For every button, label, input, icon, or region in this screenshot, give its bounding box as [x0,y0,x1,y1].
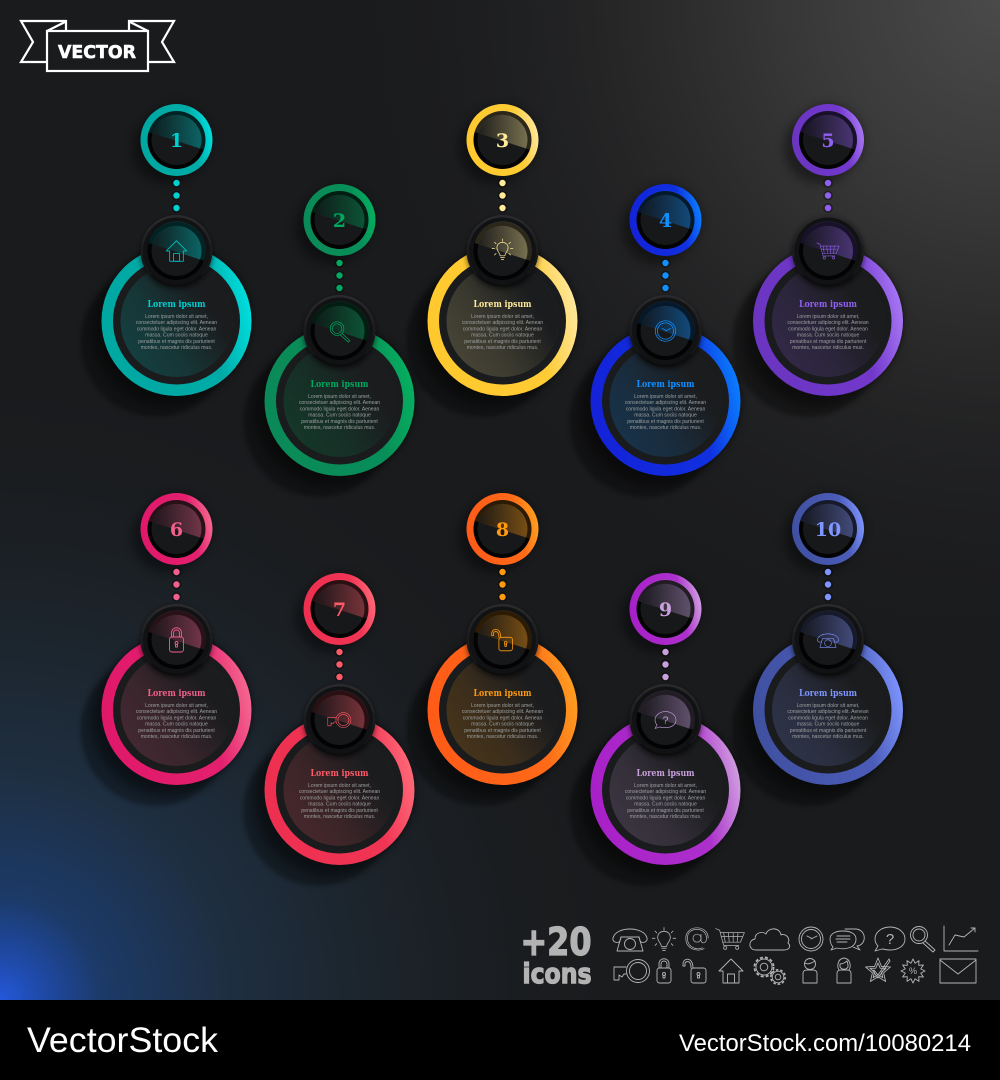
footer band [0,1000,1000,1080]
step 9: violet [590,573,740,865]
number badge 5: 5 [821,130,835,152]
body text 10: penatibus et magnis dis parturient [790,728,867,734]
body text 7: penatibus et magnis dis parturient [301,808,378,814]
body text 2: montes, nascetur ridiculus mus. [304,425,375,431]
step 6: pink [102,493,252,785]
number badge 3 [466,104,538,176]
number badge 8: 8 [496,519,509,541]
heading 9: Lorem ipsum [636,768,695,779]
body text 8: penatibus et magnis dis parturient [464,728,541,734]
body text 9: commodo ligula eget dolor. Aenean [626,795,705,801]
icon: house [140,215,212,287]
body text 10: massa. Cum sociis natoque [797,722,859,728]
body text 2: massa. Cum sociis natoque [308,413,371,419]
heading 1: Lorem ipsum [148,299,206,310]
main circle 5 [753,246,903,396]
body text 1: montes, nascetur ridiculus mus. [141,345,212,351]
body text 7: consectetuer adipiscing elit. Aenean [299,789,380,795]
icon: open padlock [466,604,538,676]
icon: light bulb [466,215,538,287]
body text 8: massa. Cum sociis natoque [471,722,534,728]
main circle 4 [590,326,740,476]
heading 7: Lorem ipsum [310,768,369,779]
number badge 10 [792,493,864,565]
body text 7: massa. Cum sociis natoque [308,802,371,808]
body text 9: penatibus et magnis dis parturient [627,808,704,814]
heading 2: Lorem ipsum [310,379,369,390]
body text 1: massa. Cum sociis natoque [145,333,208,339]
body text 4: consectetuer adipiscing elit. Aenean [625,400,706,406]
body text 9: Lorem ipsum dolor sit amet, [634,783,697,789]
body text 10: consectetuer adipiscing elit. Aenean [787,709,869,715]
step 1: teal [102,104,252,396]
number badge 7 [304,573,376,645]
connector dots 5 [823,178,833,213]
body text 5: penatibus et magnis dis parturient [790,339,867,345]
body text 8: commodo ligula eget dolor. Aenean [463,715,542,721]
number badge 9 [630,573,702,645]
body text 3: massa. Cum sociis natoque [471,333,534,339]
body text 8: consectetuer adipiscing elit. Aenean [462,709,543,715]
body text 10: montes, nascetur ridiculus mus. [792,734,864,740]
body text 1: Lorem ipsum dolor sit amet, [145,314,208,320]
number badge 4 [630,184,702,256]
+20 icons label: icons [522,957,592,990]
connector dots 10 [823,567,833,602]
main circle 6 [102,635,252,785]
+20 icons label: +20 [520,920,592,964]
body text 7: montes, nascetur ridiculus mus. [304,814,375,820]
connector dots 2 [334,258,344,293]
main circle 3 [428,246,578,396]
heading 6: Lorem ipsum [148,688,206,699]
body text 4: Lorem ipsum dolor sit amet, [634,394,697,400]
footer url: VectorStock.com/10080214 [679,1030,971,1057]
body text 10: commodo ligula eget dolor. Aenean [788,715,868,721]
body text 9: consectetuer adipiscing elit. Aenean [625,789,706,795]
number badge 2 [304,184,376,256]
+20 icons label [520,920,592,990]
connector dots 4 [660,258,670,293]
body text 1: penatibus et magnis dis parturient [138,339,215,345]
body text 3: montes, nascetur ridiculus mus. [467,345,538,351]
body text 8: montes, nascetur ridiculus mus. [467,734,538,740]
icon: magnifier [304,295,376,367]
number badge 3: 3 [496,130,509,152]
long shadows behind the circles [156,140,828,811]
connector dots 8 [498,567,508,602]
body text 6: massa. Cum sociis natoque [145,722,208,728]
body text 3: penatibus et magnis dis parturient [464,339,541,345]
footer logo: VectorStock [27,1021,219,1060]
body text 5: montes, nascetur ridiculus mus. [792,345,864,351]
step 2: green [264,184,414,476]
body text 5: Lorem ipsum dolor sit amet, [797,314,859,320]
body text 2: commodo ligula eget dolor. Aenean [300,406,379,412]
body text 6: consectetuer adipiscing elit. Aenean [136,709,217,715]
body text 4: massa. Cum sociis natoque [634,413,697,419]
body text 7: Lorem ipsum dolor sit amet, [308,783,371,789]
heading 5: Lorem ipsum [799,299,857,310]
body text 5: commodo ligula eget dolor. Aenean [788,326,868,332]
icon: shopping cart [792,215,864,287]
main circle 10 [753,635,903,785]
body text 5: massa. Cum sociis natoque [797,333,859,339]
body text 2: penatibus et magnis dis parturient [301,419,378,425]
body text 5: consectetuer adipiscing elit. Aenean [787,320,869,326]
body text 6: commodo ligula eget dolor. Aenean [137,715,216,721]
main circle 1 [102,246,252,396]
icon: question bubble [630,684,702,756]
main circle 9 [590,715,740,865]
body text 1: commodo ligula eget dolor. Aenean [137,326,216,332]
connector dots 7 [334,647,344,682]
connector dots 6 [172,567,182,602]
icon: key [304,684,376,756]
main circle 2 [264,326,414,476]
number badge 10: 10 [815,519,841,541]
body text 3: commodo ligula eget dolor. Aenean [463,326,542,332]
body text 9: massa. Cum sociis natoque [634,802,697,808]
step 8: orange [428,493,578,785]
number badge 1 [140,104,212,176]
step 5: purple [753,104,903,396]
body text 8: Lorem ipsum dolor sit amet, [471,703,534,709]
body text 1: consectetuer adipiscing elit. Aenean [136,320,217,326]
number badge 6 [140,493,212,565]
connector dots 3 [498,178,508,213]
body text 10: Lorem ipsum dolor sit amet, [797,703,859,709]
step 7: red [264,573,414,865]
number badge 2: 2 [333,210,346,232]
body text 6: Lorem ipsum dolor sit amet, [145,703,208,709]
heading 8: Lorem ipsum [474,688,532,699]
icon: closed padlock [140,604,212,676]
heading 4: Lorem ipsum [636,379,695,390]
number badge 9: 9 [659,599,672,621]
main circle 7 [264,715,414,865]
number badge 5 [792,104,864,176]
number badge 7: 7 [333,599,346,621]
body text 2: Lorem ipsum dolor sit amet, [308,394,371,400]
body text 7: commodo ligula eget dolor. Aenean [300,795,379,801]
icon: telephone [792,604,864,676]
body text 6: montes, nascetur ridiculus mus. [141,734,212,740]
body text 9: montes, nascetur ridiculus mus. [630,814,701,820]
body text 2: consectetuer adipiscing elit. Aenean [299,400,380,406]
number badge 1: 1 [170,130,183,152]
body text 6: penatibus et magnis dis parturient [138,728,215,734]
connector dots 1 [172,178,182,213]
body text 4: montes, nascetur ridiculus mus. [630,425,701,431]
body text 3: Lorem ipsum dolor sit amet, [471,314,534,320]
ribbon badge: VECTOR: VECTOR [58,42,136,63]
number badge 6: 6 [170,519,183,541]
ribbon badge: VECTOR [21,21,174,71]
number badge 4: 4 [659,210,672,232]
connector dots 9 [660,647,670,682]
step 4: blue [590,184,740,476]
heading 10: Lorem ipsum [799,688,857,699]
icon: clock [630,295,702,367]
icon set [613,926,978,984]
step 10: indigo [753,493,903,785]
body text 4: penatibus et magnis dis parturient [627,419,704,425]
number badge 8 [466,493,538,565]
step 3: yellow [428,104,578,396]
heading 3: Lorem ipsum [474,299,532,310]
body text 4: commodo ligula eget dolor. Aenean [626,406,705,412]
body text 3: consectetuer adipiscing elit. Aenean [462,320,543,326]
main circle 8 [428,635,578,785]
